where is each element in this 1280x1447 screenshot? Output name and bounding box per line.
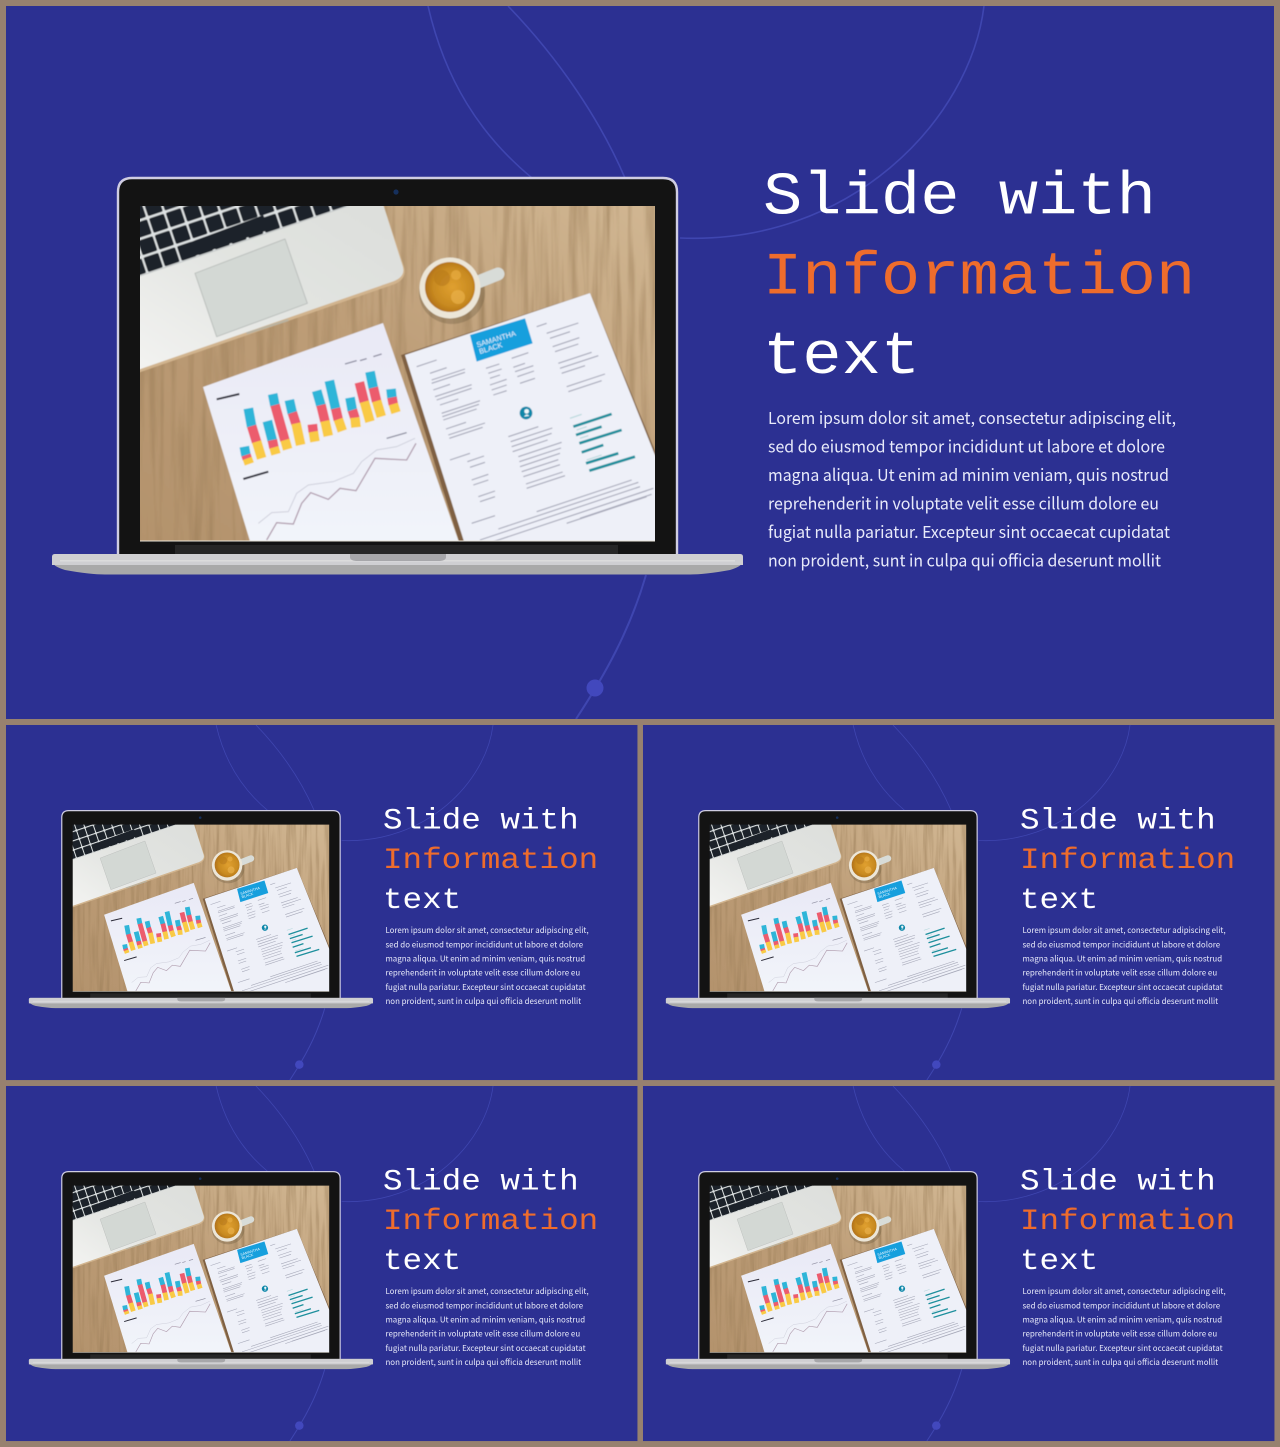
- body text: bottom left: reprehenderit in voluptate velit esse cillum dolore eu: [385, 1328, 580, 1340]
- decorative arcs and dot: bottom left: [216, 1086, 493, 1441]
- panel: small slide top right: [643, 725, 1274, 1080]
- body text: top left: fugiat nulla pariatur. Excepteur sint occaecat cupidatat: [385, 981, 586, 993]
- body text: large slide: non proident, sunt in culpa qui officia deserunt mollit: [768, 548, 1162, 572]
- body text: top left: [385, 924, 589, 1007]
- body text: bottom left: Lorem ipsum dolor sit amet, consectetur adipiscing elit,: [385, 1285, 589, 1297]
- body text: large slide: reprehenderit in voluptate velit esse cillum dolore eu: [768, 490, 1159, 514]
- body text: bottom left: sed do eiusmod tempor incididunt ut labore et dolore: [385, 1299, 584, 1311]
- laptop mockup: bottom right: [666, 1172, 1010, 1369]
- heading: top left: Information: [383, 844, 598, 878]
- body text: top left: reprehenderit in voluptate velit esse cillum dolore eu: [385, 967, 580, 979]
- heading: top left: text: [383, 884, 461, 917]
- decorative arcs and dot: top left: [216, 725, 493, 1080]
- laptop mockup: bottom left: [29, 1172, 373, 1369]
- decorative arcs and dot: top right: [853, 725, 1130, 1080]
- laptop mockup: top right: [666, 811, 1010, 1008]
- body text: bottom right: magna aliqua. Ut enim ad minim veniam, quis nostrud: [1022, 1314, 1222, 1326]
- body text: bottom left: non proident, sunt in culpa qui officia deserunt mollit: [385, 1356, 581, 1368]
- panel: small slide top left: [6, 725, 637, 1080]
- heading: top right: [1020, 804, 1235, 917]
- heading: bottom left: [383, 1165, 598, 1278]
- heading: bottom right: Slide with: [1020, 1165, 1216, 1199]
- heading: bottom right: Information: [1020, 1205, 1235, 1239]
- body text: top left: magna aliqua. Ut enim ad minim veniam, quis nostrud: [385, 953, 585, 965]
- panel: large slide: [6, 6, 1274, 719]
- heading: large slide: text: [763, 323, 920, 391]
- body text: bottom right: sed do eiusmod tempor incididunt ut labore et dolore: [1022, 1299, 1221, 1311]
- body text: top left: Lorem ipsum dolor sit amet, consectetur adipiscing elit,: [385, 924, 589, 936]
- heading: bottom left: Information: [383, 1205, 598, 1239]
- heading: top left: Slide with: [383, 804, 579, 838]
- heading: top left: [383, 804, 598, 917]
- body text: top right: [1022, 924, 1226, 1007]
- body text: bottom right: Lorem ipsum dolor sit amet, consectetur adipiscing elit,: [1022, 1285, 1226, 1297]
- body text: top left: non proident, sunt in culpa qui officia deserunt mollit: [385, 995, 581, 1007]
- heading: bottom left: text: [383, 1245, 461, 1278]
- body text: large slide: [768, 405, 1176, 572]
- body text: top right: sed do eiusmod tempor incididunt ut labore et dolore: [1022, 938, 1221, 950]
- panel: small slide bottom right: [643, 1086, 1274, 1441]
- decorative arcs and dot: large slide: [428, 6, 984, 719]
- body text: top right: Lorem ipsum dolor sit amet, consectetur adipiscing elit,: [1022, 924, 1226, 936]
- body text: large slide: fugiat nulla pariatur. Excepteur sint occaecat cupidatat: [768, 519, 1171, 543]
- heading: top right: Slide with: [1020, 804, 1216, 838]
- heading: top right: text: [1020, 884, 1098, 917]
- body text: top right: reprehenderit in voluptate velit esse cillum dolore eu: [1022, 967, 1217, 979]
- body text: large slide: sed do eiusmod tempor incididunt ut labore et dolore: [768, 434, 1165, 458]
- body text: bottom right: [1022, 1285, 1226, 1368]
- body text: top right: magna aliqua. Ut enim ad minim veniam, quis nostrud: [1022, 953, 1222, 965]
- body text: bottom right: fugiat nulla pariatur. Excepteur sint occaecat cupidatat: [1022, 1342, 1223, 1354]
- laptop mockup: top left: [29, 811, 373, 1008]
- heading: large slide: Slide with: [763, 164, 1156, 232]
- body text: bottom left: magna aliqua. Ut enim ad minim veniam, quis nostrud: [385, 1314, 585, 1326]
- body text: top left: sed do eiusmod tempor incididunt ut labore et dolore: [385, 938, 584, 950]
- panel: small slide bottom left: [6, 1086, 637, 1441]
- heading: large slide: Information: [763, 244, 1195, 312]
- heading: bottom right: [1020, 1165, 1235, 1278]
- heading: bottom left: Slide with: [383, 1165, 579, 1199]
- body text: bottom left: [385, 1285, 589, 1368]
- body text: bottom left: fugiat nulla pariatur. Excepteur sint occaecat cupidatat: [385, 1342, 586, 1354]
- body text: top right: non proident, sunt in culpa qui officia deserunt mollit: [1022, 995, 1218, 1007]
- body text: top right: fugiat nulla pariatur. Excepteur sint occaecat cupidatat: [1022, 981, 1223, 993]
- heading: top right: Information: [1020, 844, 1235, 878]
- decorative arcs and dot: bottom right: [853, 1086, 1130, 1441]
- heading: bottom right: text: [1020, 1245, 1098, 1278]
- body text: bottom right: reprehenderit in voluptate velit esse cillum dolore eu: [1022, 1328, 1217, 1340]
- laptop mockup with desk photo: large slide: [52, 178, 743, 574]
- body text: large slide: magna aliqua. Ut enim ad minim veniam, quis nostrud: [768, 462, 1169, 486]
- body text: large slide: Lorem ipsum dolor sit amet, consectetur adipiscing elit,: [768, 405, 1176, 429]
- heading: large slide: [763, 164, 1195, 391]
- body text: bottom right: non proident, sunt in culpa qui officia deserunt mollit: [1022, 1356, 1218, 1368]
